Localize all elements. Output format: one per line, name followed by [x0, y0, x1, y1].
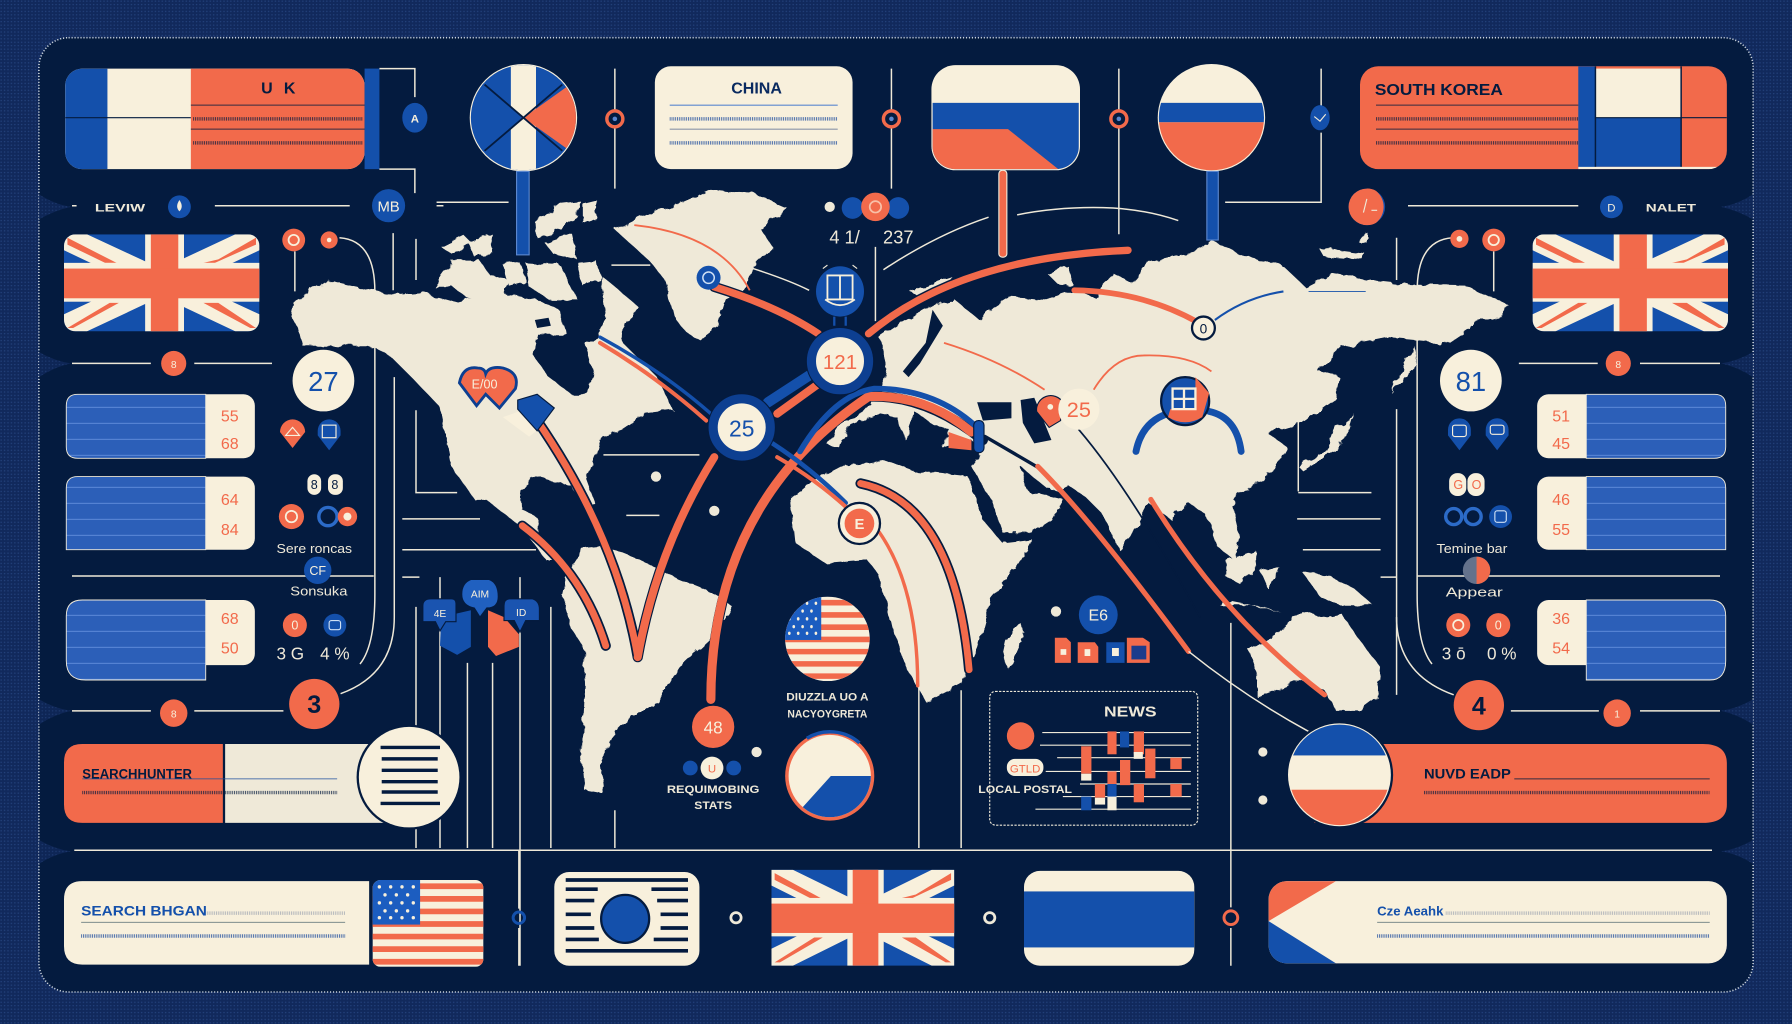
- card: UK: [65, 69, 415, 193]
- stat box left 1: 68: [221, 436, 239, 453]
- label: South Korea: SOUTH KOREA: [1375, 82, 1503, 99]
- panel: news: GTLD: [1010, 764, 1040, 776]
- badge: split pin: [1463, 557, 1490, 584]
- number circle 27: 27: [308, 366, 339, 397]
- caption: USA: NACYOYGRETA: [787, 709, 868, 721]
- Australia: [1249, 611, 1381, 711]
- pins top right: [1450, 229, 1505, 251]
- icons: map pins: [459, 367, 554, 437]
- label: Cze Aeahk: Cze Aeahk: [1377, 904, 1443, 918]
- node: circle 0: 0: [1200, 322, 1208, 337]
- number circle 81: 81: [1456, 366, 1486, 397]
- small folders: [1055, 638, 1150, 663]
- marker ring: [1111, 111, 1127, 127]
- flag: UK left: [64, 234, 259, 331]
- node: Africa E: [839, 503, 880, 544]
- stat box left 2: [66, 477, 255, 550]
- card: China: [655, 66, 853, 169]
- pole: Russia flag: [999, 170, 1007, 257]
- stats: 0%: 0 %: [1487, 643, 1516, 663]
- stat box right 2: 55: [1552, 522, 1570, 539]
- flag: UK right: [1533, 234, 1728, 331]
- label: China: CHINA: [731, 81, 782, 98]
- shields and bubbles: ID: [516, 608, 526, 619]
- ring: cream right: [985, 913, 995, 923]
- curved side bracket right: [1397, 238, 1454, 695]
- badge: CF: CF: [309, 564, 326, 578]
- Indonesia and Japan islands: [910, 233, 1418, 611]
- badge: blue pin right: D: [1607, 202, 1616, 214]
- round flag with cross: [470, 64, 578, 171]
- label: Search hunter: SEARCHHUNTER: [82, 766, 192, 781]
- badge: E6: E6: [1088, 608, 1108, 625]
- stat box right 2: [1537, 477, 1726, 550]
- caption: Requimobing stats: [667, 784, 759, 812]
- Greenland: [615, 190, 787, 339]
- badge: E6: [1079, 595, 1118, 634]
- world map: [291, 190, 1510, 794]
- icon: blue hub: [816, 265, 864, 326]
- card: South Korea: [1360, 66, 1727, 169]
- pin: 48: [692, 706, 734, 748]
- icon group right stats: O: [1472, 478, 1482, 492]
- top center stat group: 4 1/: [829, 226, 861, 247]
- top center stat group: 237: [883, 226, 914, 247]
- stat box left 3: [66, 600, 255, 680]
- circle: text lines: [357, 725, 462, 830]
- stats: 4%: 4 %: [320, 643, 350, 663]
- Arctic islands: [433, 200, 600, 299]
- stat box right 1: [1537, 394, 1726, 458]
- caption: Requimobing stats: REQUIMOBING: [667, 784, 759, 796]
- orange dot pin right: 1: [1614, 710, 1620, 721]
- badge: blue pin right: [1600, 195, 1623, 218]
- orange dot pin left: 8: [171, 710, 177, 721]
- shields and bubbles: AIM: [471, 590, 489, 601]
- stat box right 2: 46: [1552, 492, 1570, 509]
- icons lower right: [1446, 613, 1510, 637]
- route node: 25S: [707, 393, 776, 462]
- icons lower left: [283, 613, 346, 637]
- number circle 4: [1454, 680, 1504, 730]
- icon group left stats: 8: [311, 478, 318, 492]
- pin: 48: 48: [704, 718, 723, 738]
- icon: blue swirl: [697, 266, 721, 290]
- label: Leviw: LEVIW: [95, 202, 146, 214]
- icons: map pins: E/00: [472, 378, 498, 392]
- stat box right 3: 54: [1552, 641, 1570, 658]
- shields and bubbles: 4E: [434, 609, 446, 620]
- node: 25: 25: [1067, 397, 1091, 422]
- card: Search hunter: [64, 744, 385, 823]
- North America: [291, 274, 673, 560]
- pin: orange: [1036, 396, 1063, 427]
- icon group right stats: [1446, 418, 1512, 528]
- small orange pin right: 8: [1615, 360, 1621, 371]
- number circle 27: [293, 350, 354, 411]
- pin: A: A: [411, 113, 419, 125]
- badge: MB: [372, 189, 405, 222]
- flag circle: blue cream: [785, 731, 880, 823]
- node: circle 0: [1192, 317, 1215, 339]
- small orange pin left: [161, 351, 186, 376]
- curved side bracket left: [339, 238, 394, 694]
- label: News: NEWS: [1104, 705, 1157, 721]
- pins top left: [282, 229, 338, 251]
- label: Nalet: NALET: [1646, 202, 1697, 214]
- South America: [562, 546, 731, 794]
- badge: blue drop: [168, 195, 191, 218]
- marker ring: [607, 111, 623, 127]
- icon group left stats: [279, 419, 357, 529]
- pin: shield: [1310, 105, 1330, 130]
- panel: news: [978, 691, 1198, 825]
- ring: cream left: [731, 913, 741, 923]
- stat box left 2: 64: [221, 492, 239, 509]
- label: Sere roncas: Sere roncas: [277, 542, 352, 556]
- top center stat group: [825, 193, 914, 247]
- node: 25: [1058, 389, 1099, 430]
- Madagascar: [1002, 623, 1025, 670]
- round flag: tricolour: [1286, 720, 1393, 830]
- node: E arc: [1136, 377, 1241, 451]
- badge: orange blue: [1349, 189, 1385, 225]
- small orange pin left: 8: [171, 360, 177, 371]
- panel edge notches: [39, 194, 1753, 864]
- stat box right 3: [1537, 600, 1726, 680]
- label: Temine bar: Temine bar: [1437, 542, 1507, 556]
- stats: 30: 3 ō: [1442, 643, 1466, 663]
- stat box left 3: 68: [221, 611, 239, 628]
- pin row: [683, 757, 741, 779]
- card: bottom right: [1269, 881, 1727, 963]
- map inland seas: [535, 310, 1051, 443]
- stat box left 1: 55: [221, 409, 239, 426]
- card: blue cream flag: [1024, 871, 1194, 966]
- label: Appear: Appear: [1446, 586, 1503, 600]
- flag circle: USA: [784, 597, 871, 681]
- pole: round flag: [517, 171, 529, 255]
- panel: news: LOCAL POSTAL: [978, 784, 1072, 796]
- caption: Requimobing stats: STATS: [694, 800, 732, 812]
- stat box right 3: 36: [1552, 611, 1570, 628]
- small orange pin right: [1606, 351, 1631, 376]
- caption: USA: DIUZZLA UO A: [786, 692, 869, 704]
- round flag stripes: [1158, 64, 1266, 172]
- flag: UK center: [771, 870, 954, 966]
- stats: 36: 3 G: [276, 643, 304, 663]
- card: Search began: [64, 881, 369, 965]
- icons lower right: 0: [1495, 619, 1502, 633]
- number circle 81: [1440, 350, 1502, 411]
- ring: orange: [1224, 911, 1238, 925]
- Africa: [791, 459, 1032, 702]
- Eurasia: [826, 240, 1510, 560]
- pin row: U: [708, 764, 716, 776]
- marker ring: [883, 111, 899, 127]
- flight routes: [522, 208, 1366, 731]
- card: text lines with circle: [554, 872, 699, 966]
- number circle 3: [289, 679, 339, 729]
- orange dot pin right: [1603, 699, 1631, 727]
- flag: USA card: [373, 880, 483, 967]
- label: Sonsuka: Sonsuka: [290, 584, 347, 598]
- stat box right 1: 51: [1552, 409, 1570, 426]
- icons lower left: 0: [291, 619, 298, 633]
- route node: 121: 121: [823, 351, 857, 374]
- card: Nuvd Eadp: [1314, 744, 1727, 823]
- caption: USA: [786, 692, 869, 721]
- label: Nuvd Eadp: NUVD EADP: [1424, 766, 1511, 782]
- label: Search began: SEARCH BHGAN: [81, 903, 207, 919]
- stat box right 1: 45: [1552, 436, 1570, 453]
- card: Russia flag: [931, 65, 1080, 171]
- number circle 4: 4: [1472, 692, 1486, 720]
- icon group left stats: 8: [331, 478, 338, 492]
- icon group right stats: G: [1453, 478, 1463, 492]
- stat box left 2: 84: [221, 522, 239, 539]
- badge: CF: [304, 557, 331, 584]
- shields and bubbles: [423, 579, 539, 656]
- stat box left 3: 50: [221, 641, 239, 658]
- ring: blue: [513, 912, 525, 923]
- orange dot pin left: [160, 699, 187, 727]
- node: Africa E: E: [854, 517, 864, 533]
- label: UK: U K: [261, 81, 299, 98]
- badge: MB: MB: [377, 199, 400, 215]
- decorative dots: [651, 471, 1267, 805]
- pole: round flag right: [1207, 171, 1218, 240]
- pin: A: [402, 103, 427, 133]
- number circle 3: 3: [307, 691, 321, 719]
- route node: 25S: 25: [729, 416, 754, 442]
- route node: 121: [806, 327, 874, 395]
- stat box left 1: [66, 394, 255, 458]
